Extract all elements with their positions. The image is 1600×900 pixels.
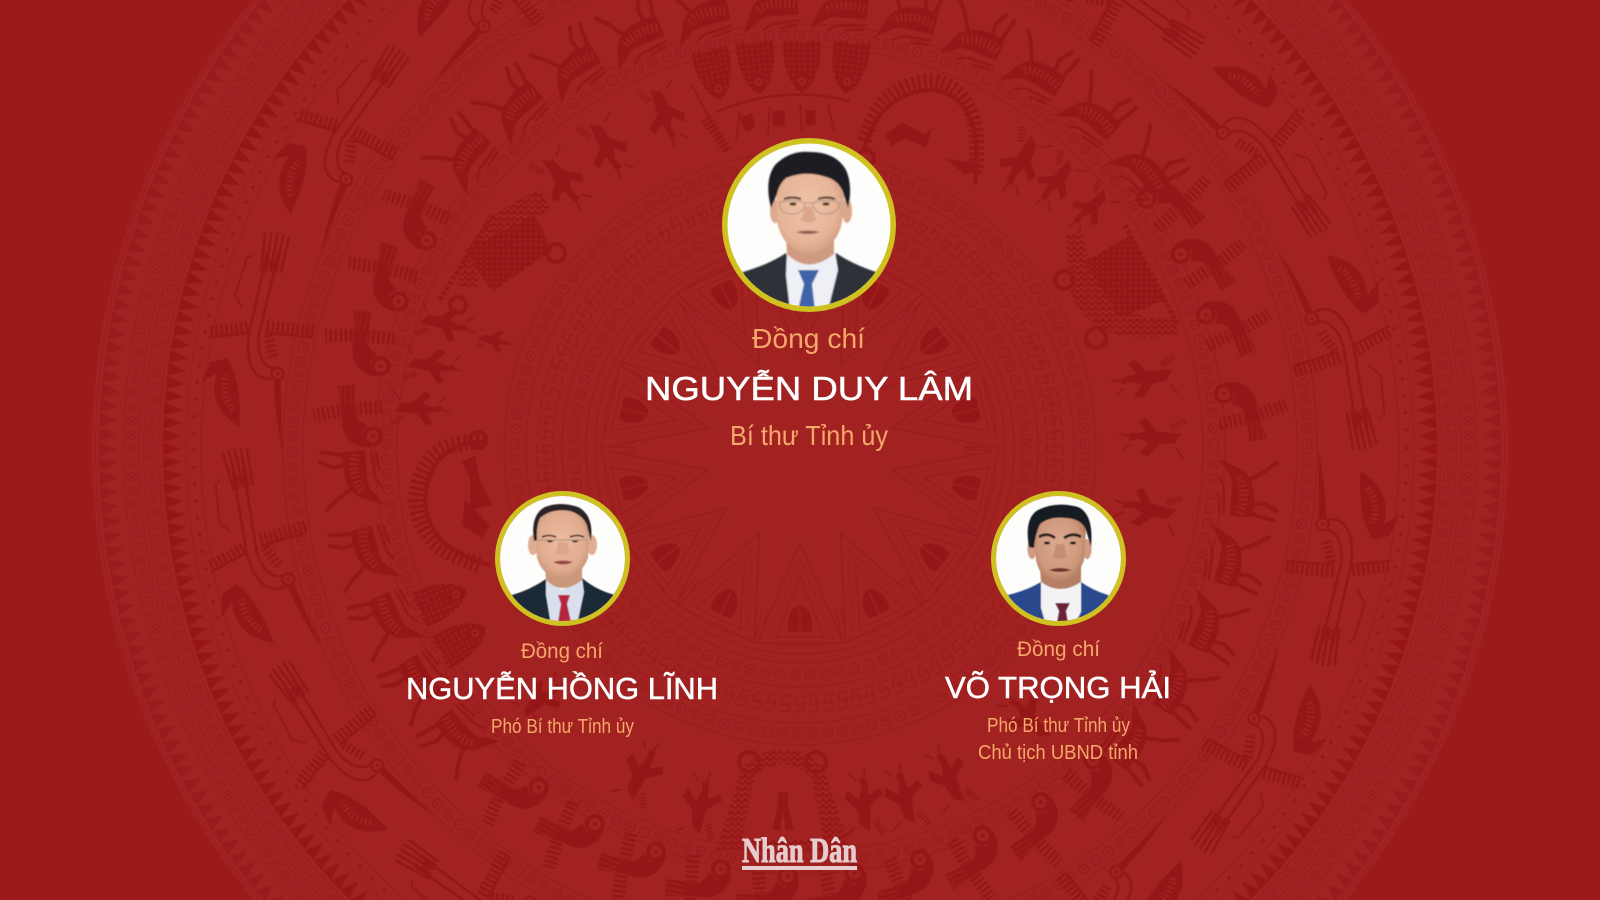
role: Bí thư Tỉnh ủy: Bí thư Tỉnh ủy [730, 420, 888, 451]
label: Đồng chí: Đồng chí [521, 640, 603, 663]
boat left [440, 190, 565, 313]
name: NGUYỄN DUY LÂM: NGUYỄN DUY LÂM [645, 370, 973, 407]
dragon boat left [416, 432, 492, 565]
person 3: Võ Trọng Hải [945, 490, 1171, 764]
label: Đồng chí: Đồng chí [1017, 638, 1100, 661]
portrait 1 [725, 140, 895, 315]
role: Chủ tịch UBND tỉnh: Chủ tịch UBND tỉnh [978, 742, 1138, 764]
house bottom [716, 749, 850, 850]
portrait 3 [991, 490, 1126, 625]
label: Đồng chí: Đồng chí [752, 323, 865, 354]
dragon boat top [858, 81, 985, 185]
name: NGUYỄN HỒNG LĨNH: NGUYỄN HỒNG LĨNH [406, 670, 718, 706]
portrait 2 [495, 490, 630, 625]
role: Phó Bí thư Tỉnh ủy: Phó Bí thư Tỉnh ủy [491, 716, 634, 738]
person 2: Nguyễn Hồng Lĩnh [406, 490, 718, 738]
person 1: Nguyễn Duy Lâm [645, 140, 973, 451]
name: VÕ TRỌNG HẢI: VÕ TRỌNG HẢI [945, 670, 1171, 705]
boat right [1055, 225, 1178, 348]
role: Phó Bí thư Tỉnh ủy: Phó Bí thư Tỉnh ủy [987, 715, 1130, 737]
logo: Nhân Dân: Nhân Dân [742, 831, 857, 870]
